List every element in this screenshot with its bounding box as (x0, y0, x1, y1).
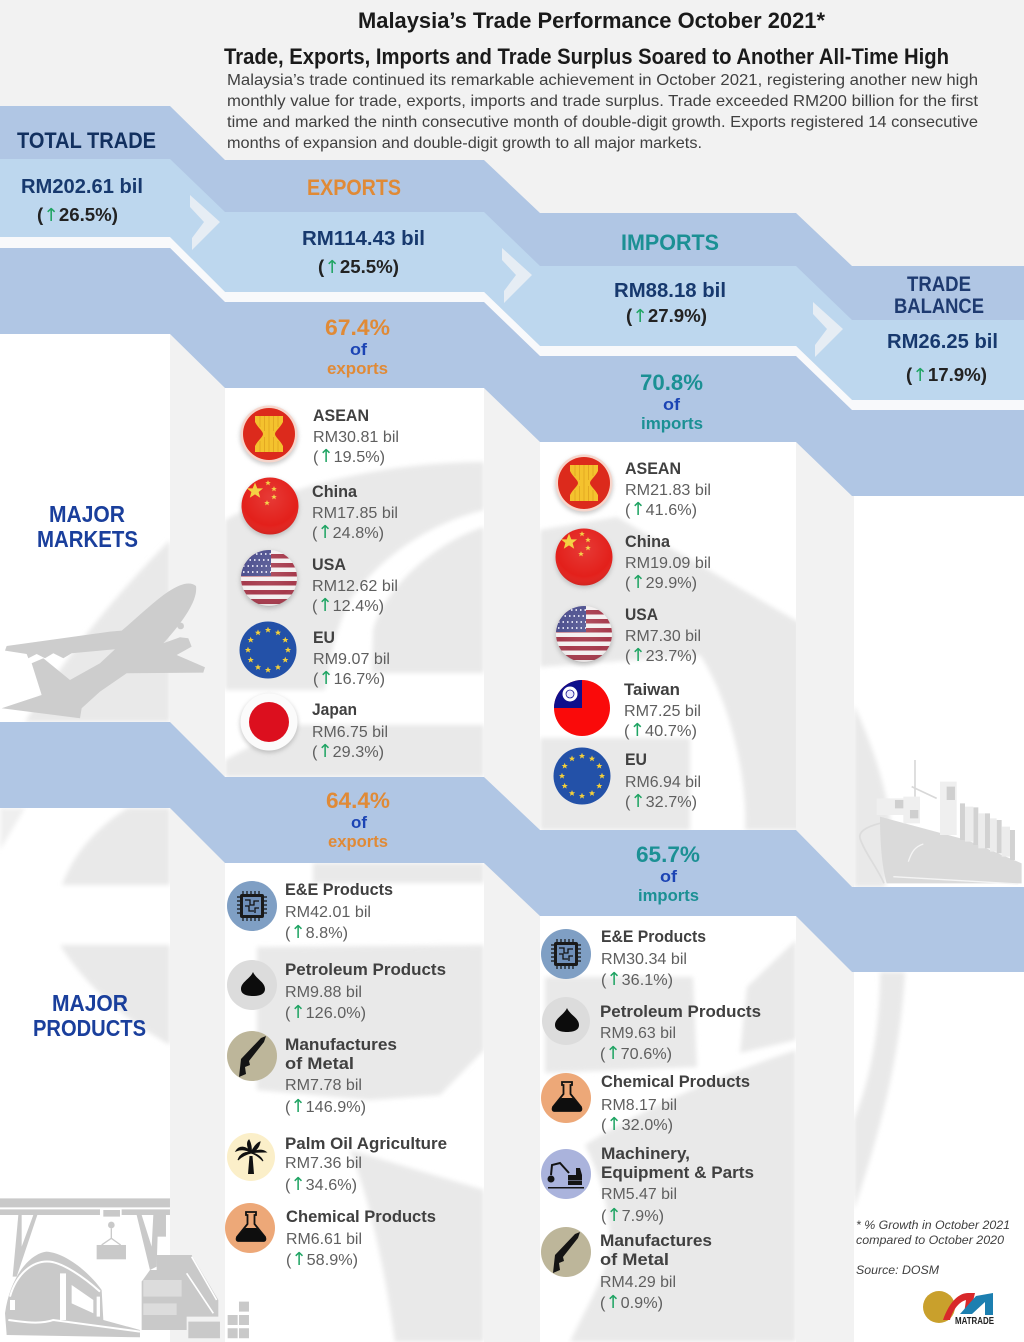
export market: USA: USA (312, 555, 346, 574)
imports market share (640, 370, 703, 433)
import product: chemical: RM8.17 bil (601, 1097, 677, 1114)
imports block (614, 230, 726, 327)
export product: E&E: E&E Products (285, 880, 393, 899)
intro paragraph: months of expansion and double-digit growth to all major markets. (227, 135, 702, 152)
export market: China: (↑24.8%) (312, 522, 384, 543)
export product: chemical (225, 1203, 436, 1270)
trade balance block: TRADE (907, 273, 971, 296)
import product: machinery: Machinery, (601, 1144, 690, 1163)
exports product share: exports (328, 832, 388, 851)
import product: machinery: Equipment & Parts (601, 1163, 754, 1182)
exports block: (↑25.5%) (318, 257, 399, 278)
panel: import products (541, 927, 761, 1313)
export market: ASEAN (240, 406, 399, 467)
footnote and source: compared to October 2020 (856, 1233, 1004, 1247)
export product: petroleum: (↑126.0%) (285, 1002, 366, 1023)
import product: E&E: E&E Products (601, 927, 706, 946)
exports market share: exports (327, 359, 388, 378)
import product: petroleum: (↑70.6%) (600, 1043, 672, 1064)
import market: EU: (↑32.7%) (625, 791, 697, 812)
export product: palm oil: RM7.36 bil (285, 1155, 362, 1172)
flow band: major markets share (0, 248, 1024, 496)
export product: manufactures of metal (227, 1031, 397, 1117)
import product: manufactures of metal: (↑0.9%) (600, 1292, 663, 1313)
imports block: RM88.18 bil (614, 280, 726, 302)
import product: machinery: (↑7.9%) (601, 1205, 664, 1226)
exports product share: of (351, 813, 367, 832)
imports product share: of (660, 867, 677, 886)
import market: EU: RM6.94 bil (625, 774, 701, 791)
imports product share (636, 842, 700, 905)
import market: USA: USA (625, 605, 658, 624)
export market: ASEAN: (↑19.5%) (313, 446, 385, 467)
trade balance block: RM26.25 bil (887, 331, 998, 353)
export product: chemical: RM6.61 bil (286, 1231, 362, 1248)
title: Malaysia’s Trade Performance October 2021* (358, 8, 825, 33)
heading: major markets: MARKETS (37, 526, 138, 552)
flow band: section headers (0, 106, 1024, 340)
exports product share (326, 788, 390, 851)
export product: chemical: Chemical Products (286, 1207, 436, 1226)
export product: manufactures of metal: Manufactures (285, 1035, 397, 1054)
total trade block: RM202.61 bil (21, 176, 143, 198)
exports block (302, 175, 425, 278)
export product: chemical: (↑58.9%) (286, 1249, 358, 1270)
import product: E&E: (↑36.1%) (601, 969, 673, 990)
export market: ASEAN: RM30.81 bil (313, 429, 399, 446)
illustration: gantry crane, train and truck (0, 1198, 249, 1338)
exports market share: 67.4% (325, 315, 390, 340)
imports market share: imports (641, 414, 703, 433)
total trade block: (↑26.5%) (37, 205, 118, 226)
export product: petroleum (227, 960, 446, 1023)
export market: EU (240, 622, 390, 689)
total trade block (17, 128, 156, 226)
import market: Taiwan: RM7.25 bil (624, 703, 701, 720)
import product: manufactures of metal (541, 1227, 712, 1313)
import product: manufactures of metal: of Metal (600, 1250, 669, 1269)
illustration: airplane (2, 584, 205, 718)
exports block: EXPORTS (307, 175, 401, 200)
heading: major products (33, 990, 146, 1041)
logo: MATRADE: MATRADE (955, 1316, 994, 1327)
imports market share: of (663, 395, 680, 414)
import market: ASEAN: (↑41.6%) (625, 499, 697, 520)
import market: Taiwan (553, 679, 701, 741)
panel: export products (225, 880, 447, 1270)
heading: major products: PRODUCTS (33, 1015, 146, 1041)
band gap highlight (0, 237, 1024, 410)
import market: China (555, 528, 711, 593)
export market: Japan: RM6.75 bil (312, 724, 388, 741)
export market: Japan (240, 694, 388, 762)
trade balance block: BALANCE (894, 295, 984, 318)
import product: E&E: RM30.34 bil (601, 951, 687, 968)
export product: E&E: (↑8.8%) (285, 922, 348, 943)
import product: petroleum: RM9.63 bil (600, 1025, 676, 1042)
trade balance block (887, 273, 998, 386)
intro paragraph: time and marked the ninth consecutive month of double-digit growth. Exports registered 14 consecutive (227, 114, 978, 131)
export product: E&E: RM42.01 bil (285, 904, 371, 921)
heading: major products: MAJOR (52, 990, 128, 1016)
import product: manufactures of metal: RM4.29 bil (600, 1274, 676, 1291)
import market: EU: EU (625, 750, 647, 769)
export market: EU: EU (313, 628, 335, 647)
import product: chemical: Chemical Products (601, 1072, 750, 1091)
import market: USA: (↑23.7%) (625, 645, 697, 666)
export market: EU: RM9.07 bil (313, 651, 390, 668)
import product: E&E (541, 927, 706, 990)
imports market share: 70.8% (640, 370, 703, 395)
export product: palm oil (227, 1133, 447, 1195)
export market: Japan: (↑29.3%) (312, 741, 384, 762)
export market: China: China (312, 482, 358, 501)
export market: China: RM17.85 bil (312, 505, 398, 522)
import market: ASEAN (555, 454, 711, 520)
trade balance block: (↑17.9%) (906, 365, 987, 386)
intro paragraph: Malaysia’s trade continued its remarkable achievement in October 2021, registering another new high (227, 72, 978, 89)
export product: manufactures of metal: RM7.78 bil (285, 1077, 362, 1094)
export market: USA (240, 549, 398, 616)
import market: EU (554, 748, 701, 812)
export product: E&E (227, 880, 393, 943)
arrow chevron: total trade to exports (190, 195, 220, 250)
panel: export markets (240, 406, 399, 762)
import market: USA (555, 605, 701, 666)
export product: palm oil: Palm Oil Agriculture (285, 1134, 447, 1153)
import market: Taiwan: Taiwan (624, 680, 680, 699)
heading: major markets: MAJOR (49, 501, 125, 527)
import market: ASEAN: RM21.83 bil (625, 482, 711, 499)
export product: palm oil: (↑34.6%) (285, 1174, 357, 1195)
import market: China: (↑29.9%) (625, 572, 697, 593)
imports product share: 65.7% (636, 842, 700, 867)
imports block: (↑27.9%) (626, 306, 707, 327)
export market: Japan: Japan (312, 700, 357, 719)
export market: USA: RM12.62 bil (312, 578, 398, 595)
flow band: major products share (0, 722, 1024, 972)
import market: USA: RM7.30 bil (625, 628, 701, 645)
exports product share: 64.4% (326, 788, 390, 813)
import product: petroleum: Petroleum Products (600, 1002, 761, 1021)
globe watermark (0, 462, 905, 1342)
export product: petroleum: Petroleum Products (285, 960, 446, 979)
export market: China (241, 478, 398, 543)
import product: chemical: (↑32.0%) (601, 1114, 673, 1135)
flow band: headline values (0, 159, 1024, 400)
import market: ASEAN: ASEAN (625, 459, 681, 478)
arrow chevron: imports to trade balance (813, 302, 843, 357)
total trade block: TOTAL TRADE (17, 128, 156, 153)
footnote and source: * % Growth in October 2021 (856, 1218, 1010, 1232)
exports market share: of (350, 340, 367, 359)
footnote and source (856, 1218, 1010, 1277)
imports product share: imports (638, 886, 699, 905)
import market: Taiwan: (↑40.7%) (624, 720, 697, 741)
intro paragraph: monthly value for trade, exports, imports and trade surplus. Trade exceeded RM200 billion for the first (227, 93, 979, 110)
export product: petroleum: RM9.88 bil (285, 984, 362, 1001)
logo: MATRADE (923, 1291, 994, 1327)
import product: manufactures of metal: Manufactures (600, 1231, 712, 1250)
illustration: cargo ship (860, 760, 1022, 884)
heading: major markets (37, 501, 138, 552)
export market: EU: (↑16.7%) (313, 668, 385, 689)
footnote and source: Source: DOSM (856, 1263, 939, 1277)
white column panels (0, 334, 1024, 1342)
panel: import markets (553, 454, 711, 812)
import product: chemical (541, 1072, 750, 1135)
arrow chevron: exports to imports (502, 248, 532, 303)
import product: petroleum (542, 997, 761, 1064)
subtitle: Trade, Exports, Imports and Trade Surplus Soared to Another All-Time High (224, 44, 949, 69)
import product: machinery: RM5.47 bil (601, 1186, 677, 1203)
import market: China: RM19.09 bil (625, 555, 711, 572)
import product: machinery (541, 1144, 754, 1226)
intro paragraph (227, 72, 979, 152)
exports market share (325, 315, 390, 378)
export product: manufactures of metal: (↑146.9%) (285, 1096, 366, 1117)
export market: ASEAN: ASEAN (313, 406, 369, 425)
export product: manufactures of metal: of Metal (285, 1054, 354, 1073)
exports block: RM114.43 bil (302, 228, 425, 250)
export market: USA: (↑12.4%) (312, 595, 384, 616)
import market: China: China (625, 532, 671, 551)
imports block: IMPORTS (621, 230, 719, 255)
